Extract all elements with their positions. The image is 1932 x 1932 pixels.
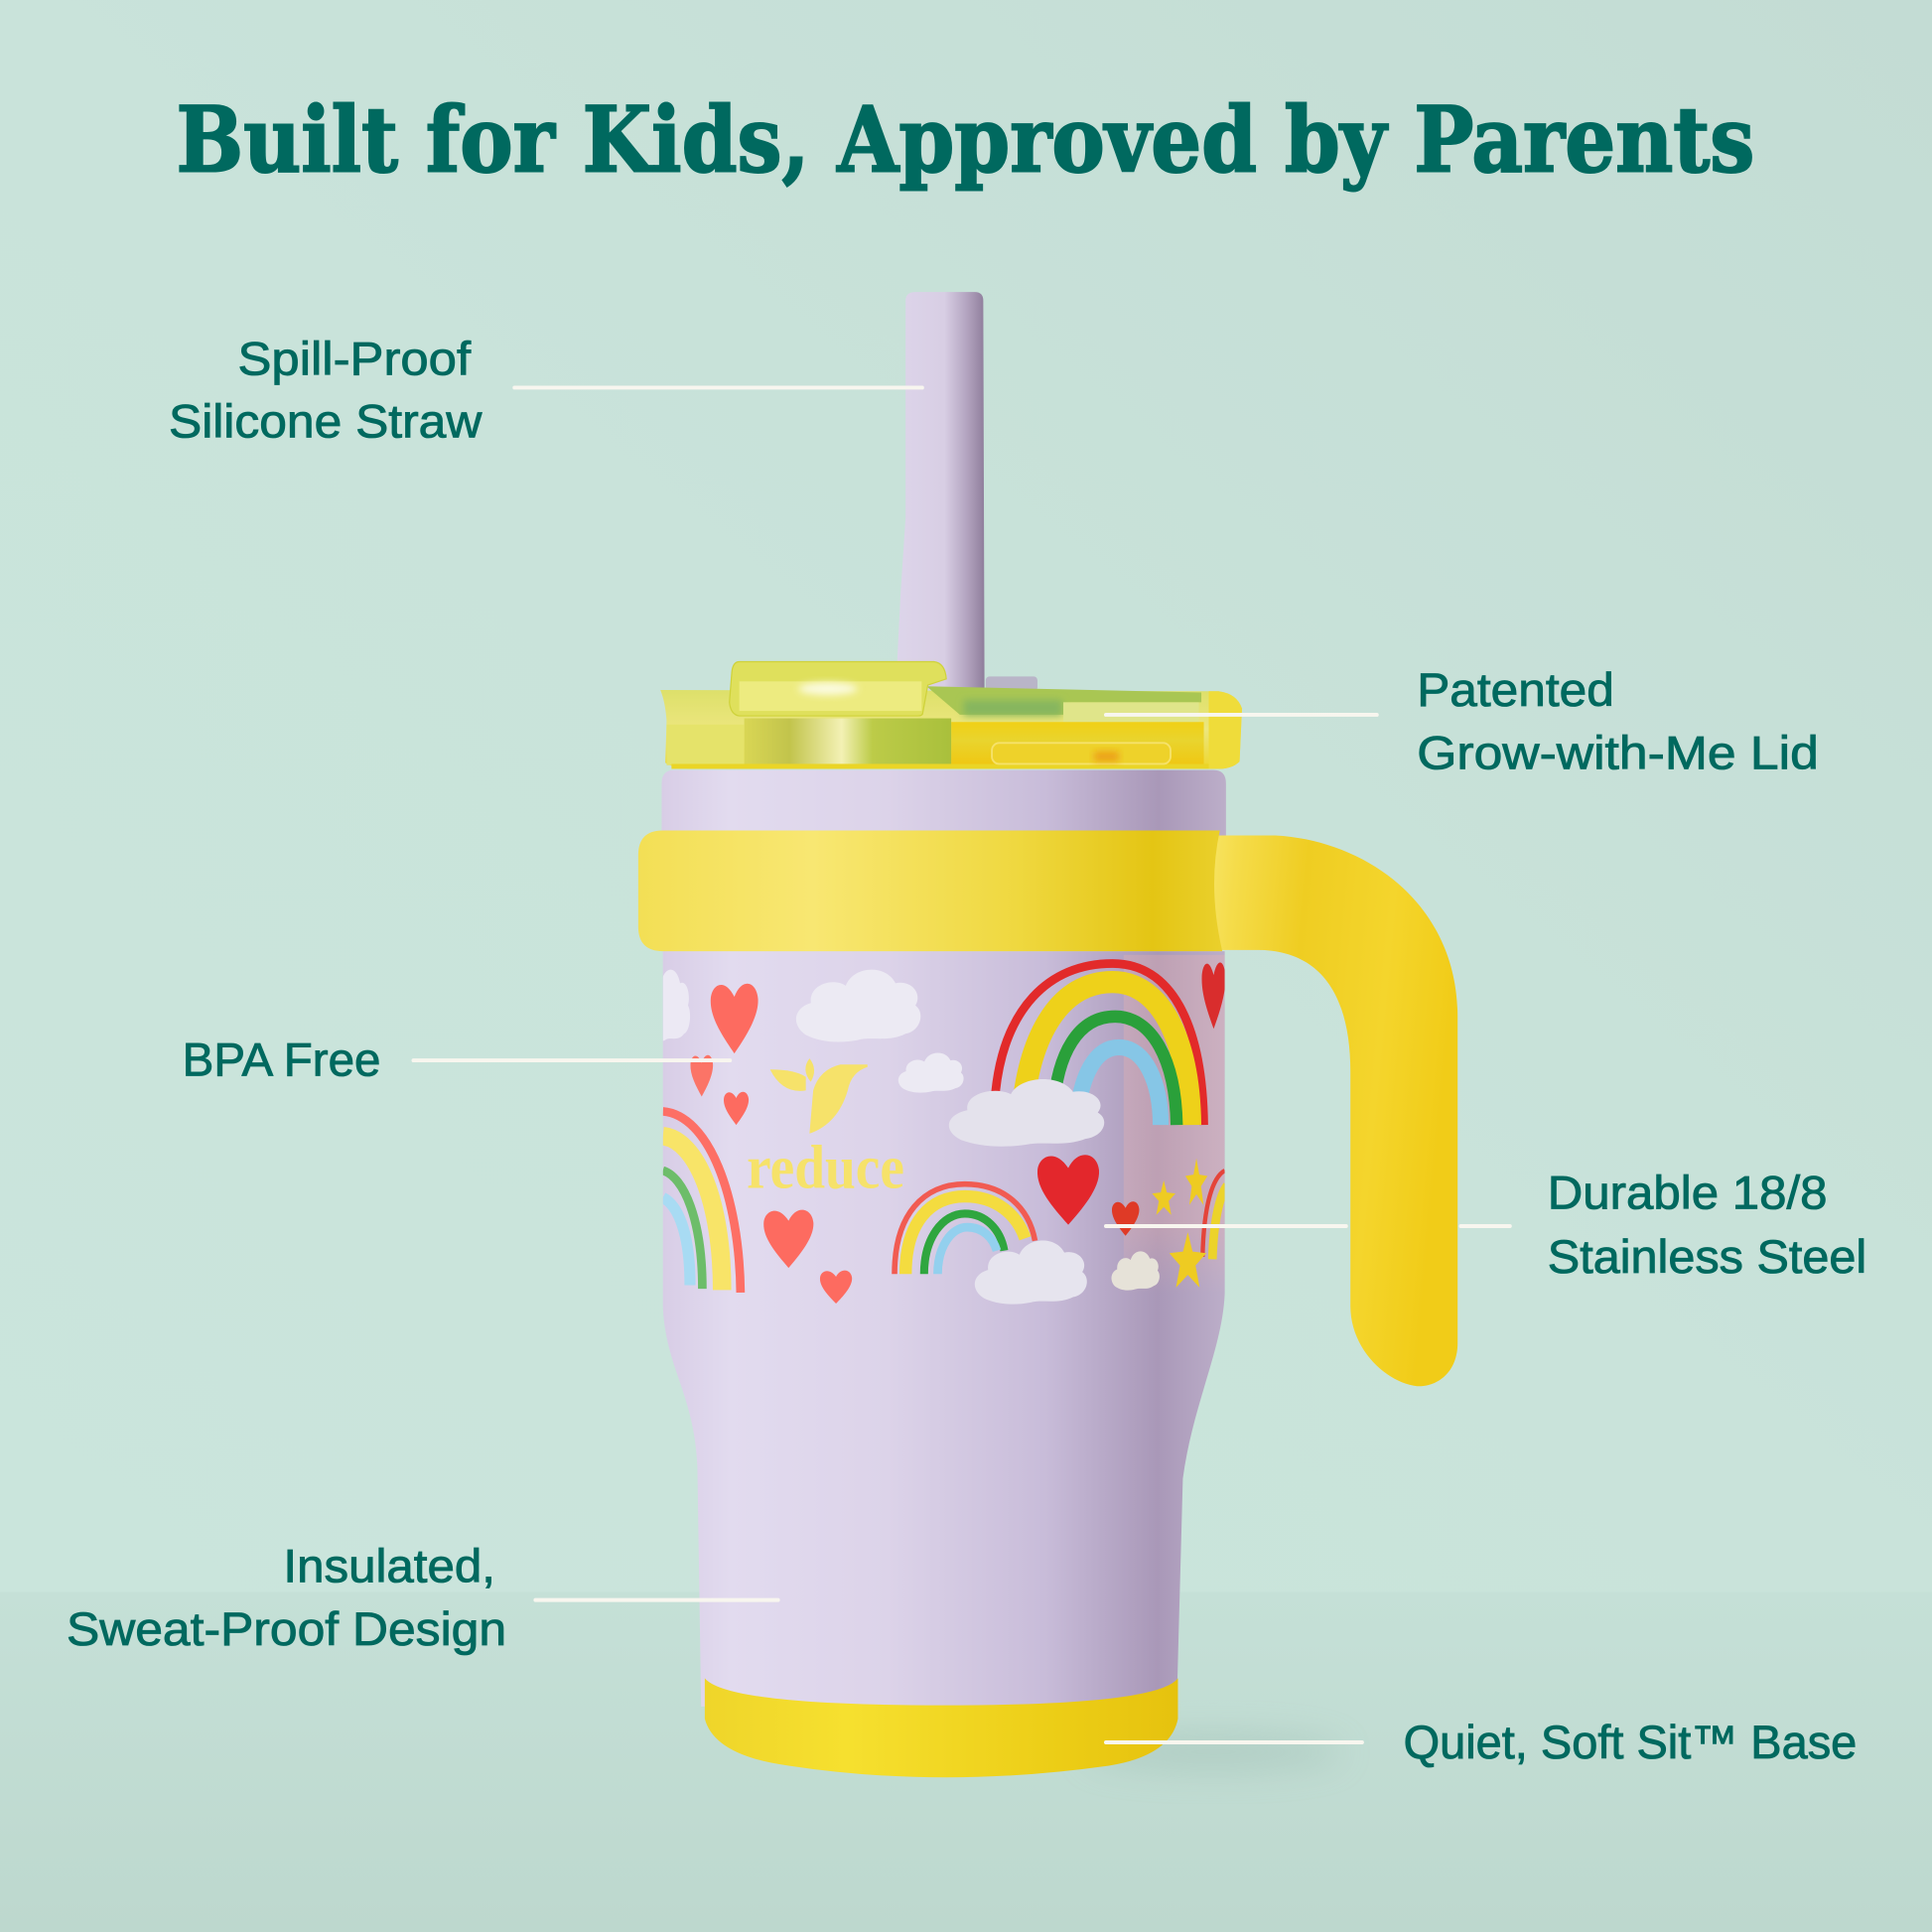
callout: soft sit base [1104, 1716, 1857, 1768]
rainbow: large right [996, 964, 1204, 1125]
lid center disc [745, 719, 951, 763]
star: medium [1185, 1159, 1207, 1205]
heart: coral lowest [820, 1271, 852, 1304]
star: small [1152, 1180, 1175, 1215]
heart: coral lower [763, 1210, 813, 1268]
heart: coral tiny [724, 1092, 749, 1125]
lid slider glare [798, 683, 858, 695]
background floor [0, 1591, 1932, 1932]
lid pale window [1063, 702, 1199, 725]
callout: insulated [67, 1540, 780, 1655]
callout: spill-proof straw: Silicone Straw [169, 395, 483, 448]
lid [660, 661, 1242, 768]
lid shell [660, 690, 1242, 768]
handle [1195, 835, 1457, 1386]
lid green strip [926, 686, 1201, 715]
callout: insulated: Sweat-Proof Design [67, 1602, 506, 1655]
straw [896, 292, 985, 690]
cloud: under small rainbow [975, 1241, 1087, 1305]
lid bottom rim [671, 763, 1213, 768]
body print [640, 955, 1227, 1305]
cloud: left edge [663, 969, 690, 1040]
callout: insulated: Insulated, [283, 1540, 495, 1592]
callout: stainless steel: Durable 18/8 [1548, 1166, 1828, 1218]
logo leaf small [805, 1058, 814, 1082]
heart: red small [1112, 1201, 1139, 1236]
lid inner slot [992, 743, 1171, 763]
lid slider [730, 661, 946, 716]
title: Built for Kids, Approved by Parents [176, 88, 1754, 194]
lid slider highlight [740, 681, 921, 711]
callout: BPA free [183, 1033, 732, 1085]
brand logo [749, 1058, 903, 1189]
neck [661, 770, 1226, 838]
callout: patented lid: Grow-with-Me Lid [1417, 726, 1819, 778]
callout: patented lid: Patented [1417, 663, 1614, 716]
lid end cap [1208, 691, 1242, 768]
callout: soft sit base: Quiet, Soft Sit™ Base [1404, 1716, 1857, 1768]
callout: spill-proof straw [169, 332, 924, 448]
cloud: lower small [1112, 1251, 1160, 1291]
rainbow: small center [895, 1184, 1035, 1274]
lid left window [666, 725, 745, 765]
pink reflection [1124, 955, 1225, 1294]
callout: spill-proof straw: Spill-Proof [238, 332, 472, 384]
cloud: top [796, 970, 920, 1041]
heart: red large [1037, 1155, 1099, 1225]
collar [638, 830, 1222, 951]
cloud: under large rainbow [949, 1079, 1104, 1147]
logo leaf left [770, 1069, 806, 1091]
logo swoosh [809, 1064, 868, 1134]
star: large [1170, 1232, 1206, 1288]
callout: stainless steel [1104, 1166, 1866, 1283]
cup body [663, 951, 1225, 1707]
floor shadow [1084, 1734, 1343, 1769]
lid green window [964, 700, 1062, 716]
cloud: small [898, 1053, 964, 1093]
rainbow: cut off left [663, 1111, 741, 1293]
logo wordmark: reduce [747, 1134, 904, 1201]
heart: red edge [1202, 962, 1225, 1029]
lid back tab [986, 676, 1037, 691]
base [705, 1678, 1177, 1777]
callout: patented lid [1104, 663, 1819, 778]
product: tumbler [638, 292, 1457, 1777]
heart: coral large [711, 984, 759, 1053]
callout: BPA free: BPA Free [183, 1033, 380, 1085]
callout: stainless steel: Stainless Steel [1548, 1230, 1866, 1283]
lid amber dot [1094, 752, 1119, 761]
heart: coral small [690, 1055, 713, 1097]
lid lower right amber [951, 722, 1204, 767]
rainbow: right edge [1202, 1171, 1227, 1259]
